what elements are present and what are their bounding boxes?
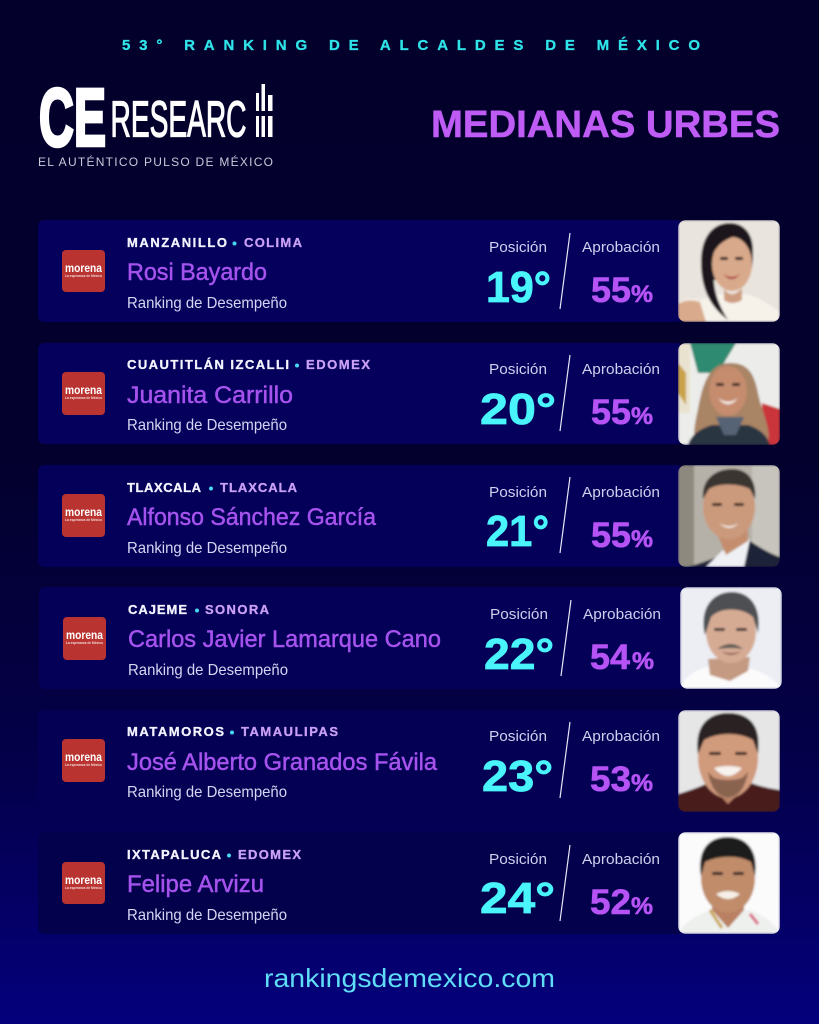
name: José Alberto Granados Fávila (127, 749, 438, 776)
icon: morena logo: La esperanza de México (65, 518, 103, 522)
position (482, 728, 553, 801)
approval: % (631, 281, 653, 308)
approval: % (631, 770, 653, 797)
icon: morena logo: La esperanza de México (65, 274, 103, 278)
panel: row 23 José Alberto Granados Fávila (38, 710, 780, 812)
subtitle: Ranking de Desempeño (127, 417, 287, 434)
approval: Aprobación (583, 606, 661, 623)
location: CUAUTITLÁN IZCALLI (127, 357, 289, 372)
icon: morena logo: La esperanza de México (65, 763, 103, 767)
footer url: rankingsdemexico.com (264, 963, 555, 993)
icon: morena logo: morena (65, 385, 103, 397)
position: 22° (484, 630, 554, 679)
subtitle: Ranking de Desempeño (127, 540, 287, 557)
approval: % (631, 526, 653, 553)
location: COLIMA (244, 235, 303, 250)
approval: Aprobación (582, 851, 660, 868)
approval (582, 361, 660, 432)
location (127, 357, 370, 372)
name: Alfonso Sánchez García (127, 504, 377, 531)
location: TAMAULIPAS (241, 724, 338, 739)
position (480, 361, 556, 434)
location: TLAXCALA (220, 480, 298, 495)
location: MATAMOROS (127, 724, 224, 739)
location: SONORA (205, 602, 270, 617)
approval: 55 (591, 271, 631, 310)
logo tagline: EL AUTÉNTICO PULSO DE MÉXICO (38, 154, 273, 169)
location: CAJEME (128, 602, 187, 617)
subtitle: Ranking de Desempeño (127, 784, 287, 801)
icon: morena logo: La esperanza de México (65, 886, 103, 890)
position: Posición (489, 239, 547, 256)
icon: morena logo: La esperanza de México (66, 641, 104, 645)
photo: Carlos Javier Lamarque Cano (680, 587, 782, 689)
location (127, 724, 338, 739)
position: 21° (486, 507, 549, 556)
logo: CE Research: RESEARC (110, 90, 246, 148)
position: Posición (489, 728, 547, 745)
photo: José Alberto Granados Fávila (678, 710, 780, 812)
icon: morena logo: morena (65, 263, 103, 275)
icon: morena logo (62, 494, 105, 537)
position: 24° (480, 874, 555, 923)
position: Posición (489, 851, 547, 868)
logo: CE Research (39, 72, 272, 164)
panel: row 20 Juanita Carrillo (38, 343, 780, 445)
name: Felipe Arvizu (127, 871, 264, 898)
name: Rosi Bayardo (127, 259, 267, 286)
approval: Aprobación (582, 361, 660, 378)
panel: row 22 Carlos Javier Lamarque Cano (39, 587, 782, 689)
position: 23° (482, 752, 553, 801)
subtitle: Ranking de Desempeño (127, 295, 287, 312)
position (484, 606, 554, 679)
position (486, 484, 549, 556)
icon: morena logo (63, 617, 106, 660)
icon: morena logo: morena (65, 752, 103, 764)
approval: % (631, 893, 653, 920)
photo: Felipe Arvizu (678, 832, 780, 934)
photo: Juanita Carrillo (678, 343, 780, 445)
subtitle: Ranking de Desempeño (127, 907, 287, 924)
location: IXTAPALUCA (127, 847, 222, 862)
location (128, 602, 270, 617)
position: Posición (489, 361, 547, 378)
approval (582, 851, 660, 922)
approval: Aprobación (582, 484, 660, 501)
approval: Aprobación (582, 728, 660, 745)
logo: CE Research: CE (39, 72, 106, 164)
position: Posición (490, 606, 548, 623)
heading: Medianas Urbes: MEDIANAS URBES (431, 104, 780, 146)
icon: morena logo: La esperanza de México (65, 396, 103, 400)
position: 20° (480, 385, 556, 434)
icon: morena logo (62, 739, 105, 782)
location: EDOMEX (238, 847, 301, 862)
location: EDOMEX (306, 357, 370, 372)
name: Carlos Javier Lamarque Cano (128, 626, 441, 653)
top title: 53° RANKING DE ALCALDES DE MÉXICO (122, 37, 700, 54)
approval: 55 (591, 516, 631, 555)
icon: morena logo: morena (65, 875, 103, 887)
position (486, 239, 551, 312)
position: 19° (486, 263, 551, 312)
icon: morena logo (62, 372, 105, 415)
approval: 53 (590, 760, 631, 799)
position (480, 851, 555, 923)
photo: Rosi Bayardo (678, 220, 780, 322)
location (127, 480, 298, 495)
location (127, 847, 301, 862)
approval: 54 (590, 638, 631, 677)
icon: morena logo: morena (66, 630, 104, 642)
panel: row 21 Alfonso Sánchez García (38, 465, 780, 567)
approval: % (631, 403, 653, 430)
approval: 52 (590, 883, 631, 922)
icon: morena logo: morena (65, 507, 103, 519)
location: TLAXCALA (127, 480, 202, 495)
location: MANZANILLO (127, 235, 227, 250)
name: Juanita Carrillo (127, 382, 293, 409)
icon: morena logo (62, 862, 105, 904)
approval: Aprobación (582, 239, 660, 256)
location (127, 235, 303, 250)
approval (583, 606, 661, 677)
approval (582, 239, 660, 310)
approval (582, 728, 660, 799)
panel: row 19 Rosi Bayardo (38, 220, 780, 322)
subtitle: Ranking de Desempeño (128, 662, 288, 679)
position: Posición (489, 484, 547, 501)
icon: morena logo (62, 250, 105, 292)
photo: Alfonso Sánchez García (678, 465, 780, 567)
panel: row 24 Felipe Arvizu (38, 832, 780, 934)
approval (582, 484, 660, 555)
approval: % (632, 648, 654, 675)
approval: 55 (591, 393, 631, 432)
